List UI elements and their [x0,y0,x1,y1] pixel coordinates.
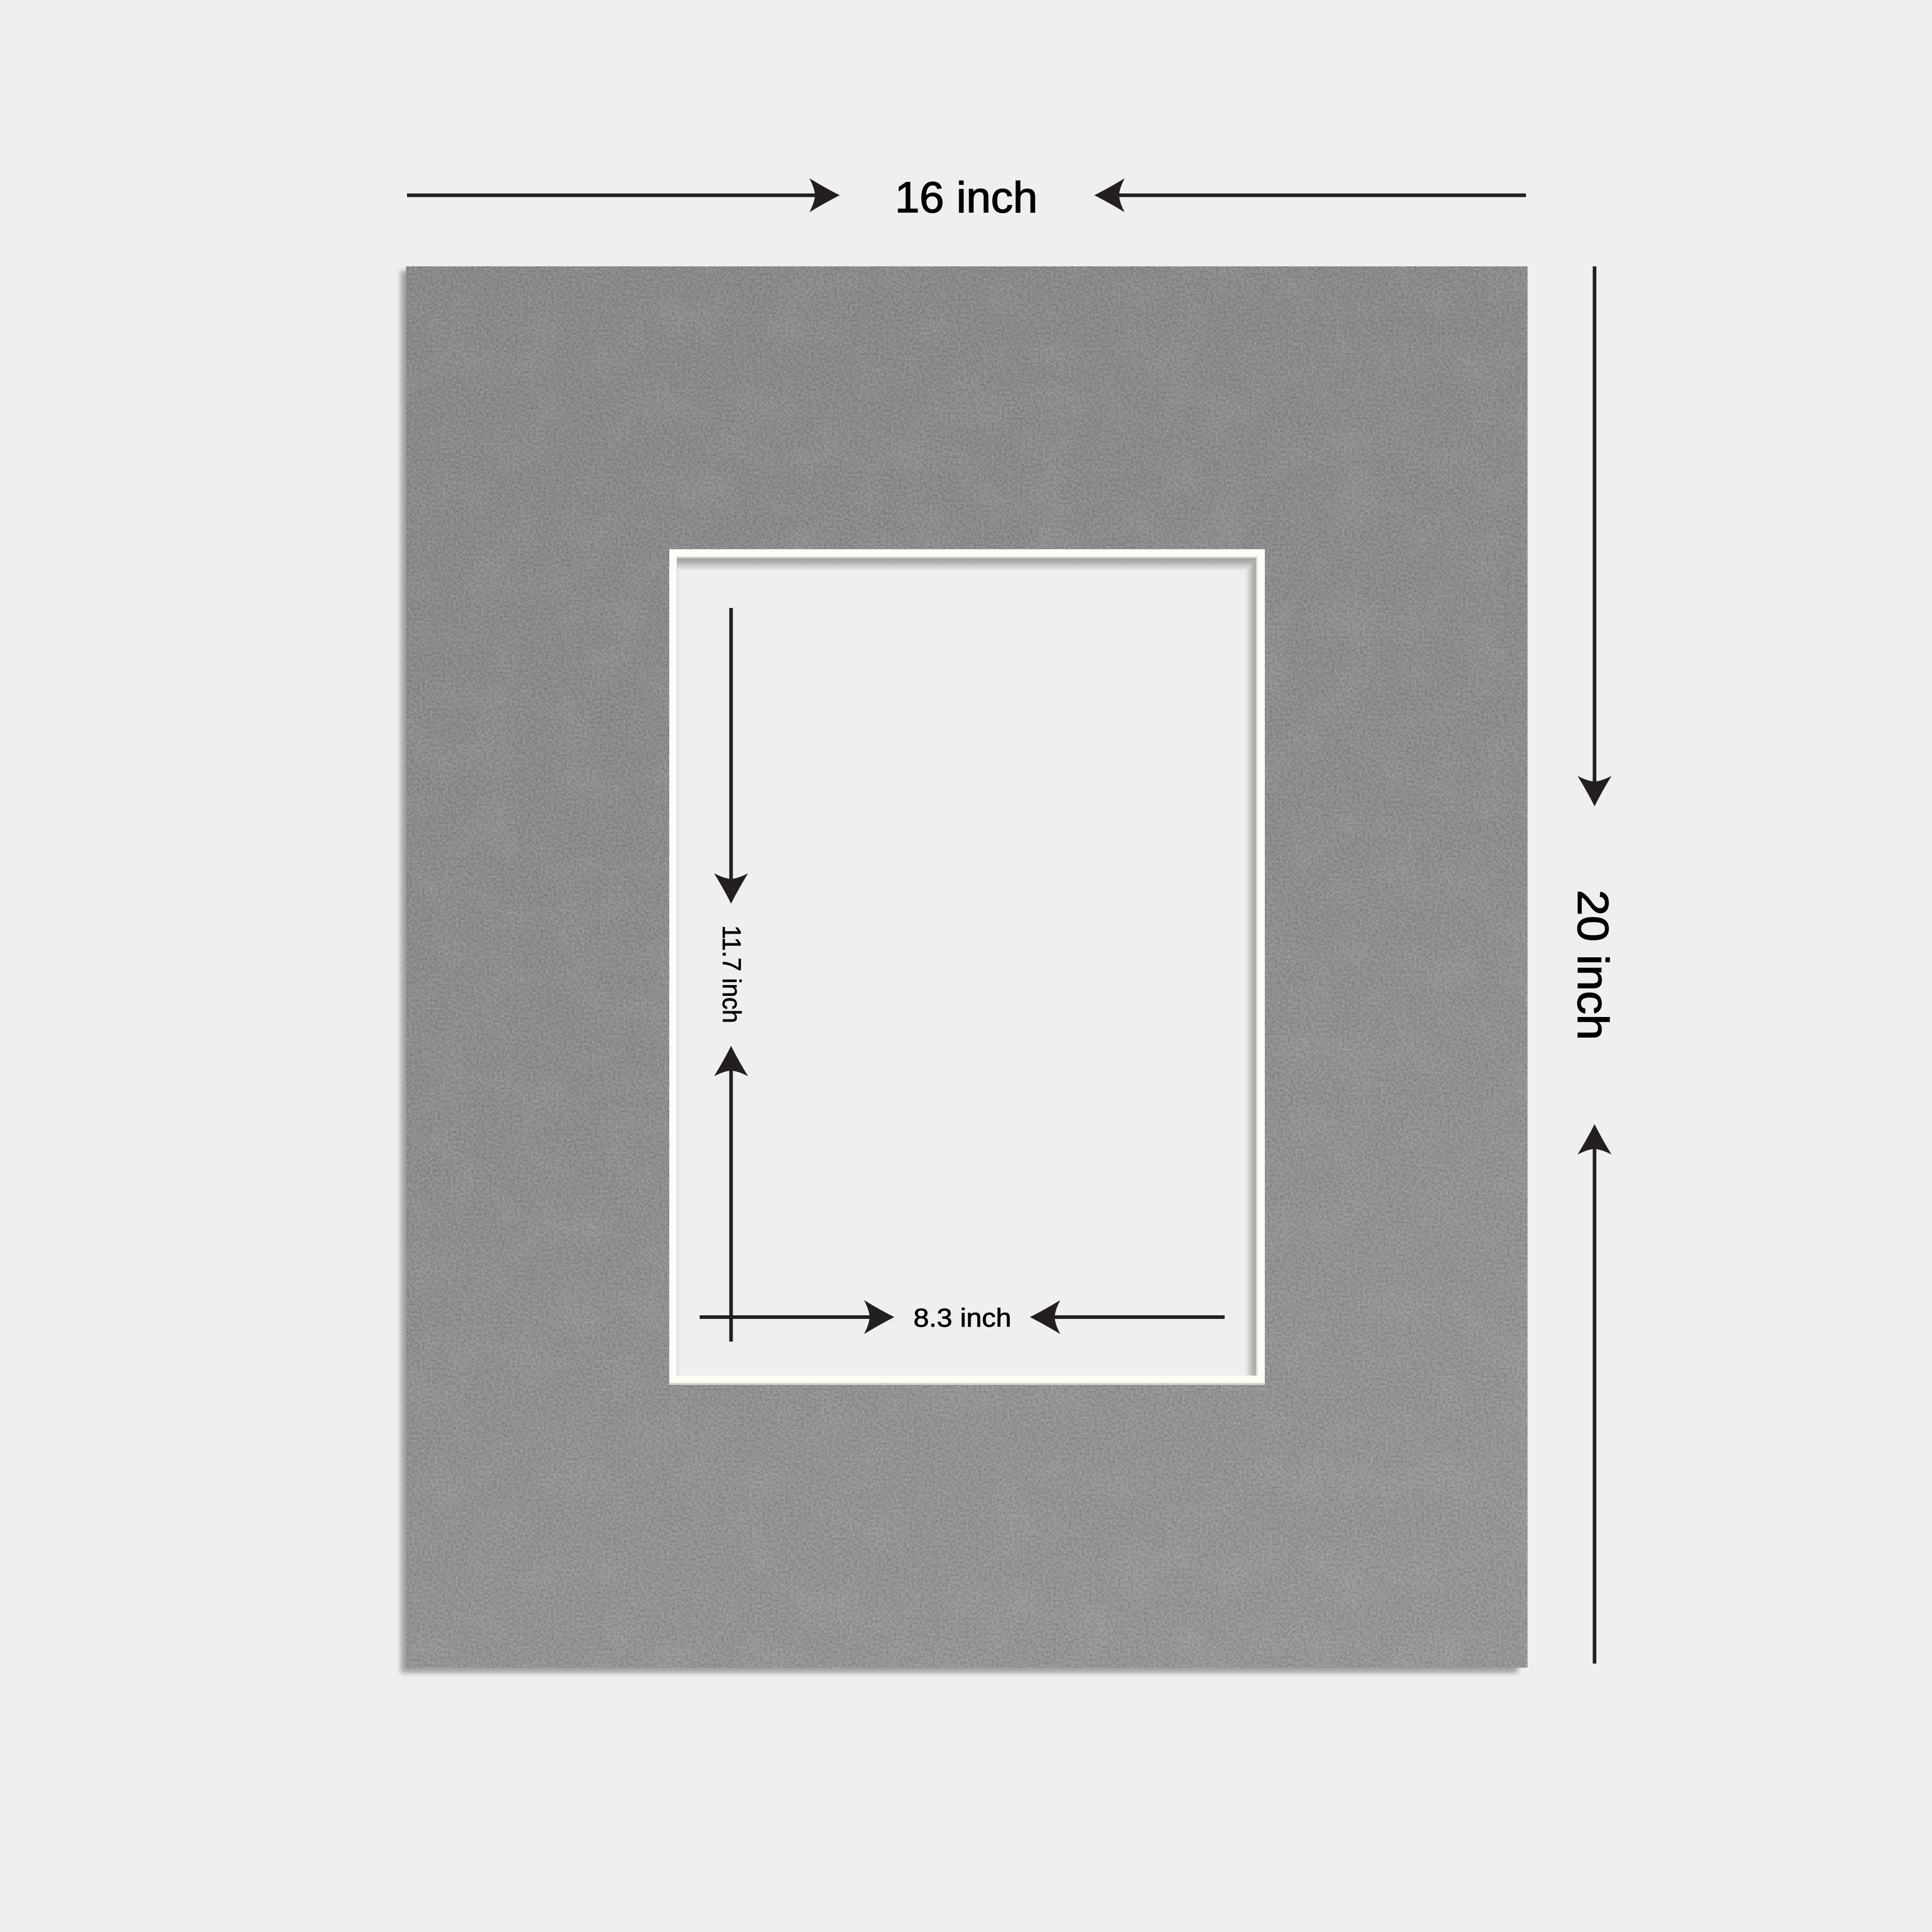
arrow: 20 inch bottom [1578,1124,1612,1664]
arrow: 16 inch left [407,178,840,212]
panel: grey mat board [401,266,1528,1673]
label: 8.3 inch: 8.3 inch [913,1303,1011,1332]
label: 11.7 inch: 11.7 inch [717,925,746,1023]
arrow: 16 inch right [1094,178,1526,212]
arrow: 20 inch top [1578,266,1612,806]
label: 16 inch: 16 inch [895,173,1038,222]
arrow: 8.3 inch left [700,1300,894,1334]
arrow: 11.7 inch bottom [714,1046,748,1342]
arrow: 8.3 inch right [1030,1300,1225,1334]
panel: mat window opening [669,549,1265,1385]
arrow: 11.7 inch top [714,608,748,904]
label: 20 inch: 20 inch [1569,890,1617,1040]
